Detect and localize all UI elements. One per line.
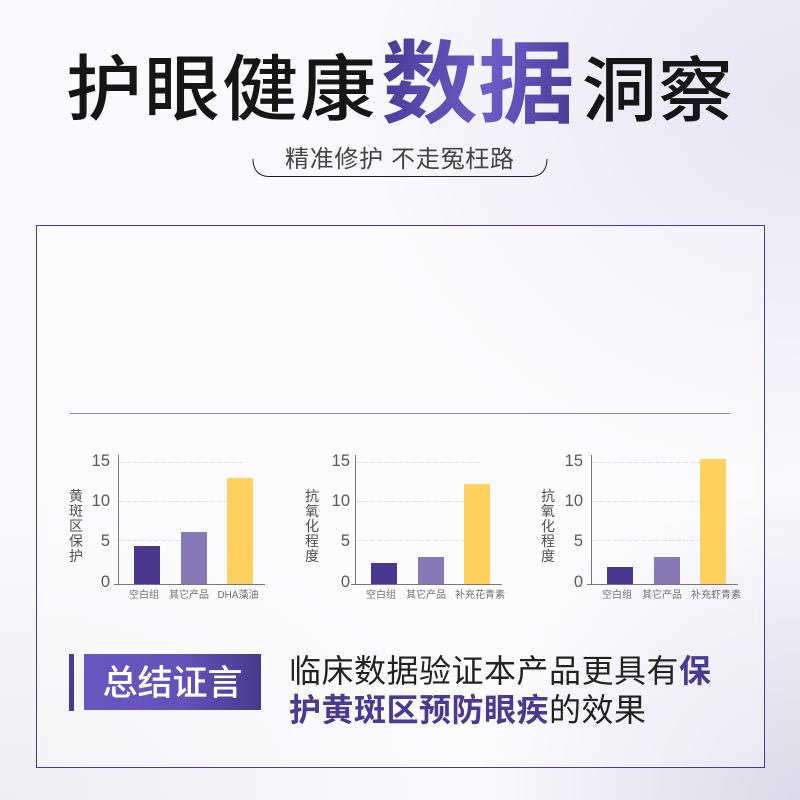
y axis title: 保 bbox=[69, 533, 83, 549]
subtitle bracket bbox=[252, 159, 548, 177]
y axis title: 程 bbox=[305, 533, 319, 549]
category labels: 补充虾青素 bbox=[691, 588, 741, 601]
y axis ticks: 10 bbox=[92, 492, 110, 510]
category labels bbox=[366, 588, 505, 601]
y axis ticks: 0 bbox=[101, 573, 110, 591]
y axis ticks: 0 bbox=[574, 573, 583, 591]
summary badge bbox=[84, 654, 261, 710]
y axis title bbox=[541, 488, 555, 564]
bar chart: antioxidant anthocyanin bbox=[305, 452, 505, 601]
title: black end words: 洞察 bbox=[582, 51, 734, 131]
y axis ticks: 5 bbox=[341, 532, 350, 550]
y axis title: 氧 bbox=[541, 503, 555, 519]
y axis title: 程 bbox=[541, 533, 555, 549]
y axis title: 黄 bbox=[69, 488, 83, 504]
category labels: 补充花青素 bbox=[455, 588, 505, 601]
title bbox=[66, 34, 734, 135]
title: black lead words: 护眼健康 bbox=[66, 50, 378, 131]
subtitle: 精准修护 不走冤枉路 bbox=[285, 146, 515, 173]
category labels: 空白组 bbox=[366, 588, 396, 601]
bar chart: antioxidant astaxanthin bbox=[541, 452, 741, 601]
divider line bbox=[70, 413, 730, 414]
category labels: DHA藻油 bbox=[217, 588, 259, 601]
category labels: 其它产品 bbox=[642, 588, 682, 601]
summary text: 临床数据验证本产品更具有保 bbox=[289, 653, 712, 689]
category labels: 空白组 bbox=[129, 588, 159, 601]
y axis ticks: 15 bbox=[92, 452, 110, 470]
y axis ticks bbox=[332, 452, 350, 591]
y axis ticks: 15 bbox=[565, 452, 583, 470]
category labels: 其它产品 bbox=[406, 588, 446, 601]
summary accent bar bbox=[69, 654, 74, 711]
bars bbox=[607, 459, 726, 584]
y axis ticks: 0 bbox=[341, 573, 350, 591]
panel: data frame bbox=[36, 225, 765, 768]
category labels bbox=[129, 588, 259, 601]
y axis title: 区 bbox=[69, 518, 83, 534]
y axis ticks: 5 bbox=[574, 532, 583, 550]
bars bbox=[134, 478, 253, 584]
y axis ticks bbox=[565, 452, 583, 591]
y axis title: 度 bbox=[305, 548, 319, 564]
y axis title: 度 bbox=[541, 548, 555, 564]
category labels bbox=[602, 588, 741, 601]
bars bbox=[371, 484, 490, 584]
y axis ticks: 15 bbox=[332, 452, 350, 470]
bar chart: macular protection bbox=[69, 452, 265, 601]
y axis title: 护 bbox=[69, 548, 83, 564]
y axis title: 抗 bbox=[305, 488, 319, 504]
y axis title: 化 bbox=[541, 518, 555, 534]
y axis ticks: 10 bbox=[565, 492, 583, 510]
y axis title bbox=[69, 488, 83, 564]
y axis title: 抗 bbox=[541, 488, 555, 504]
y axis title: 斑 bbox=[69, 503, 83, 519]
category labels: 其它产品 bbox=[169, 588, 209, 601]
summary badge: 总结证言 bbox=[102, 664, 242, 703]
y axis ticks: 10 bbox=[332, 492, 350, 510]
y axis ticks bbox=[92, 452, 110, 591]
y axis title: 化 bbox=[305, 518, 319, 534]
summary text: 护黄斑区预防眼疾的效果 bbox=[289, 692, 647, 728]
y axis ticks: 5 bbox=[101, 532, 110, 550]
y axis title bbox=[305, 488, 319, 564]
title: gradient highlight: 数据 bbox=[381, 34, 575, 135]
summary text bbox=[289, 653, 712, 728]
category labels: 空白组 bbox=[602, 588, 632, 601]
y axis title: 氧 bbox=[305, 503, 319, 519]
